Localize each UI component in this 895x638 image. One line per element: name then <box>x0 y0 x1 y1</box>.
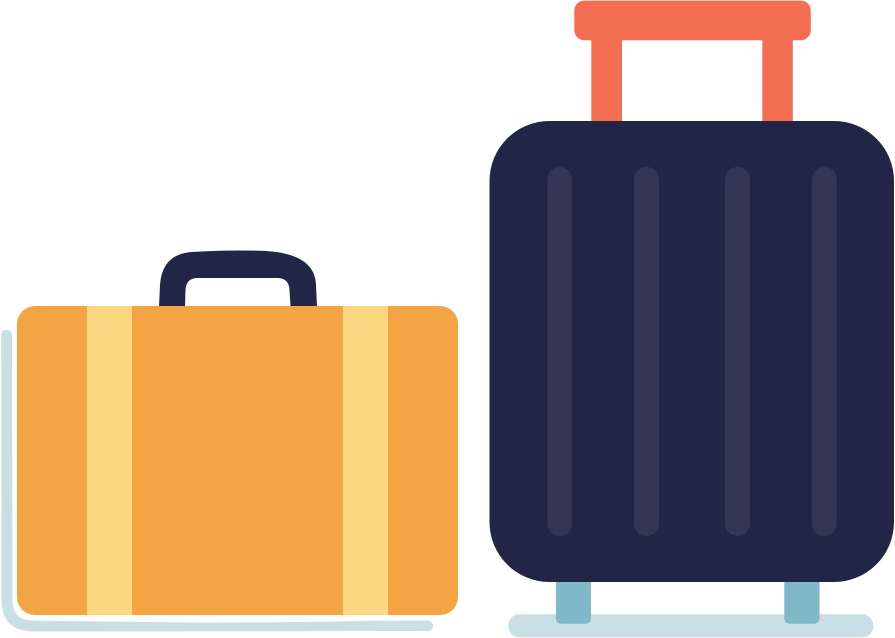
icon: briefcase <box>17 306 458 615</box>
suitcase ridge 2 <box>634 167 659 536</box>
icon: briefcase handle <box>159 250 317 306</box>
briefcase left strap <box>87 306 132 615</box>
briefcase right strap <box>343 306 388 615</box>
briefcase body <box>17 306 458 615</box>
suitcase ridge 4 <box>812 167 837 536</box>
icon: rolling suitcase <box>490 121 894 582</box>
suitcase body <box>490 121 894 582</box>
icon: left wheel <box>556 575 591 624</box>
icon: briefcase shadow line <box>1 330 433 632</box>
suitcase ridge 1 <box>547 167 572 536</box>
suitcase ridge 3 <box>725 167 750 536</box>
icon: right wheel <box>784 575 820 624</box>
icon: telescopic handle <box>574 1 811 130</box>
icon: suitcase ground shadow <box>508 614 873 637</box>
